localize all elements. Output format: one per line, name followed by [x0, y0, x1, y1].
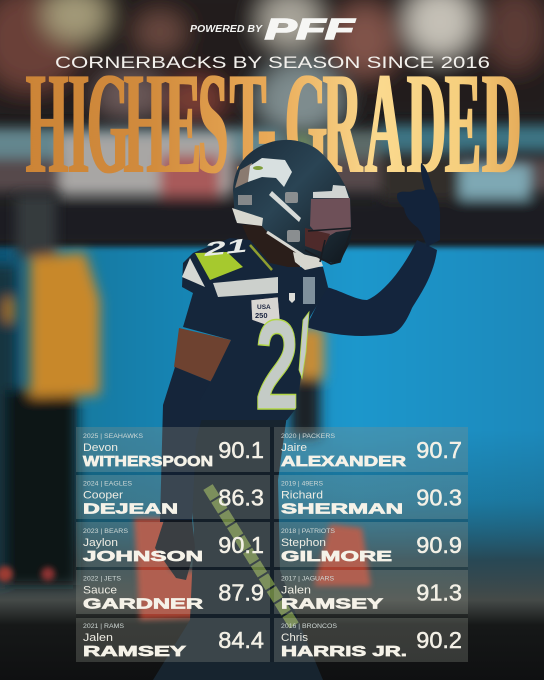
- grade: 90.7: [416, 437, 462, 463]
- last name: HARRIS JR.: [281, 644, 407, 660]
- card: 2023 Johnson: [76, 522, 270, 567]
- header: powered by PFF: [190, 14, 356, 46]
- panel shadow backing: [76, 427, 468, 662]
- last name: ALEXANDER: [281, 454, 407, 470]
- left arm skin: [174, 328, 231, 382]
- card: 2016 Harris Jr.: [274, 618, 468, 662]
- last name: GILMORE: [281, 549, 393, 565]
- season and team: 2023 | BEARS: [83, 528, 129, 535]
- leg stripe: [208, 487, 295, 627]
- powered by label: POWERED BY: [190, 23, 263, 35]
- stats panels: [76, 427, 468, 662]
- season and team: 2020 | PACKERS: [281, 433, 336, 440]
- first name: Sauce: [83, 584, 117, 596]
- first name: Jaylon: [83, 537, 118, 549]
- first name: Devon: [83, 442, 118, 454]
- last name: SHERMAN: [281, 502, 403, 518]
- season and team: 2022 | JETS: [83, 576, 122, 582]
- pants and legs: [153, 415, 323, 680]
- ear guard: [232, 208, 263, 226]
- jersey: [182, 238, 328, 420]
- visor top band: [313, 185, 349, 198]
- season and team: 2019 | 49ERS: [281, 480, 324, 488]
- season and team: 2016 | BRONCOS: [281, 623, 338, 630]
- helmet: [232, 140, 352, 270]
- chin guard: [293, 252, 323, 270]
- sliver of second digit: [299, 312, 309, 378]
- season and team: 2024 | EAGLES: [83, 480, 133, 488]
- subtitle: CORNERBACKS BY SEASON SINCE 2016: [55, 54, 490, 72]
- last name: RAMSEY: [83, 644, 187, 660]
- grade: 90.9: [416, 532, 462, 558]
- rear plate: [238, 195, 252, 205]
- last name: RAMSEY: [281, 596, 384, 612]
- left column: [76, 427, 270, 662]
- chest stripe: [213, 277, 278, 297]
- first name: Chris: [281, 632, 309, 644]
- season and team: 2025 | SEAHAWKS: [83, 433, 144, 440]
- first name: Stephon: [281, 537, 326, 549]
- grade: 91.3: [416, 580, 462, 606]
- USA 250 badge: 250: [255, 311, 268, 320]
- NFL shield: [289, 293, 295, 303]
- season and team: 2017 | JAGUARS: [281, 576, 335, 582]
- first name: Richard: [281, 490, 323, 502]
- player in Seahawks uniform: [153, 140, 440, 680]
- main title: highest-graded: HIGHEST-GRADED: [26, 42, 521, 204]
- card: 2018 Gilmore: [274, 522, 468, 567]
- first name: Jalen: [83, 632, 113, 644]
- last name: GARDNER: [83, 596, 204, 612]
- shoulder number: 21: [201, 236, 248, 261]
- mouth: [305, 228, 330, 252]
- grade: 90.1: [218, 437, 264, 463]
- card: 2020 Alexander: [274, 427, 468, 472]
- card: 2017 Ramsey: [274, 570, 468, 614]
- grade: 87.9: [218, 580, 264, 606]
- PFF logo: PFF: [265, 14, 356, 46]
- card: 2024 DeJean: [76, 475, 270, 519]
- anniversary patch: [303, 277, 315, 304]
- helmet camo panel: [235, 163, 252, 188]
- helmet eye: [253, 166, 263, 170]
- first name: Jalen: [281, 584, 311, 596]
- grade: 90.1: [218, 532, 264, 558]
- grade: 86.3: [218, 484, 264, 510]
- first name: Cooper: [83, 490, 123, 502]
- card: 2022 Gardner: [76, 570, 270, 614]
- last name: DEJEAN: [83, 502, 178, 518]
- raised glove with pointing finger: [397, 163, 440, 247]
- grade: 84.4: [218, 627, 264, 653]
- visor: [310, 198, 351, 240]
- card: 2025 Witherspoon: [76, 427, 270, 472]
- first name: Jaire: [281, 442, 307, 454]
- helmet side stripe: [269, 191, 301, 222]
- left sleeve and forearm: [160, 367, 212, 522]
- helmet clips: [285, 192, 298, 203]
- card: 2021 Ramsey: [76, 618, 270, 662]
- chin strap: [267, 232, 307, 258]
- neck: [242, 225, 300, 275]
- raised arm: [306, 240, 437, 336]
- right column: [274, 427, 468, 662]
- season and team: 2018 | PATRIOTS: [281, 528, 336, 535]
- card: 2019 Sherman: [274, 475, 468, 519]
- neon shoulder patch: [195, 252, 243, 280]
- last name: JOHNSON: [83, 549, 203, 565]
- left glove: [155, 520, 195, 580]
- grade: 90.2: [416, 627, 462, 653]
- grade: 90.3: [416, 484, 462, 510]
- chest number: 21: [255, 294, 343, 437]
- seahawk logo: [248, 158, 292, 187]
- facemask: [305, 228, 352, 264]
- sleeve stripe: [182, 258, 205, 287]
- USA 250 badge: [251, 297, 280, 325]
- season and team: 2021 | RAMS: [83, 623, 125, 630]
- last name: WITHERSPOON: [83, 454, 213, 470]
- collar stripe: [250, 245, 272, 270]
- USA 250 badge: USA: [257, 304, 271, 311]
